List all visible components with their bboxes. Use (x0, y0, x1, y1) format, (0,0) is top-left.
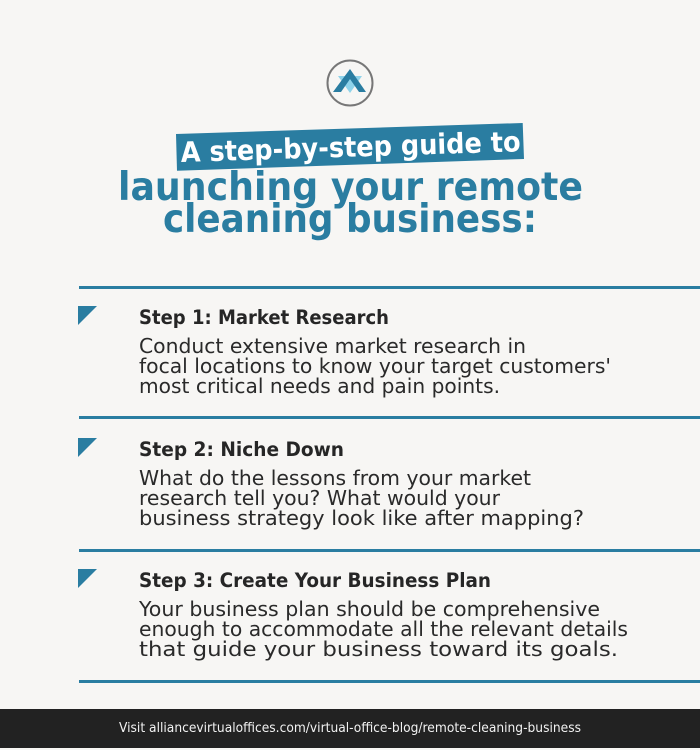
panel: step 3 (78, 549, 700, 683)
main heading (118, 165, 583, 242)
icon: company logo (328, 60, 372, 106)
step 1 text (139, 334, 611, 398)
heading banner: A step-by-step guide to (180, 125, 521, 169)
step 3 title: Step 3: Create Your Business Plan (139, 569, 491, 592)
step 1 text: Conduct extensive market research in (139, 334, 526, 358)
footer bar (0, 709, 700, 748)
panel: step 1 (78, 286, 700, 398)
step 3 text: Your business plan should be comprehensive (138, 597, 600, 621)
icon: step 3 marker (78, 569, 97, 588)
icon: step 1 marker (78, 306, 97, 325)
step 3 text: enough to accommodate all the relevant details (139, 617, 628, 641)
main heading: launching your remote (118, 165, 583, 210)
step 1 title: Step 1: Market Research (139, 306, 389, 329)
step 2 text: business strategy look like after mapping? (139, 506, 584, 530)
panel: step 2 (78, 416, 700, 530)
step 1 text: most critical needs and pain points. (139, 374, 500, 398)
footer link text: Visit alliancevirtualoffices.com/virtual-office-blog/remote-cleaning-business (119, 721, 581, 736)
step 3 text (138, 597, 628, 661)
step 3 text: that guide your business toward its goals. (139, 637, 618, 661)
step 2 text: What do the lessons from your market (139, 466, 531, 490)
icon: step 2 marker (78, 438, 97, 457)
step 1 text: focal locations to know your target customers' (139, 354, 611, 378)
step 2 title: Step 2: Niche Down (139, 438, 344, 461)
step 2 text (139, 466, 584, 530)
main heading: cleaning business: (163, 197, 537, 242)
step 2 text: research tell you? What would your (139, 486, 501, 510)
